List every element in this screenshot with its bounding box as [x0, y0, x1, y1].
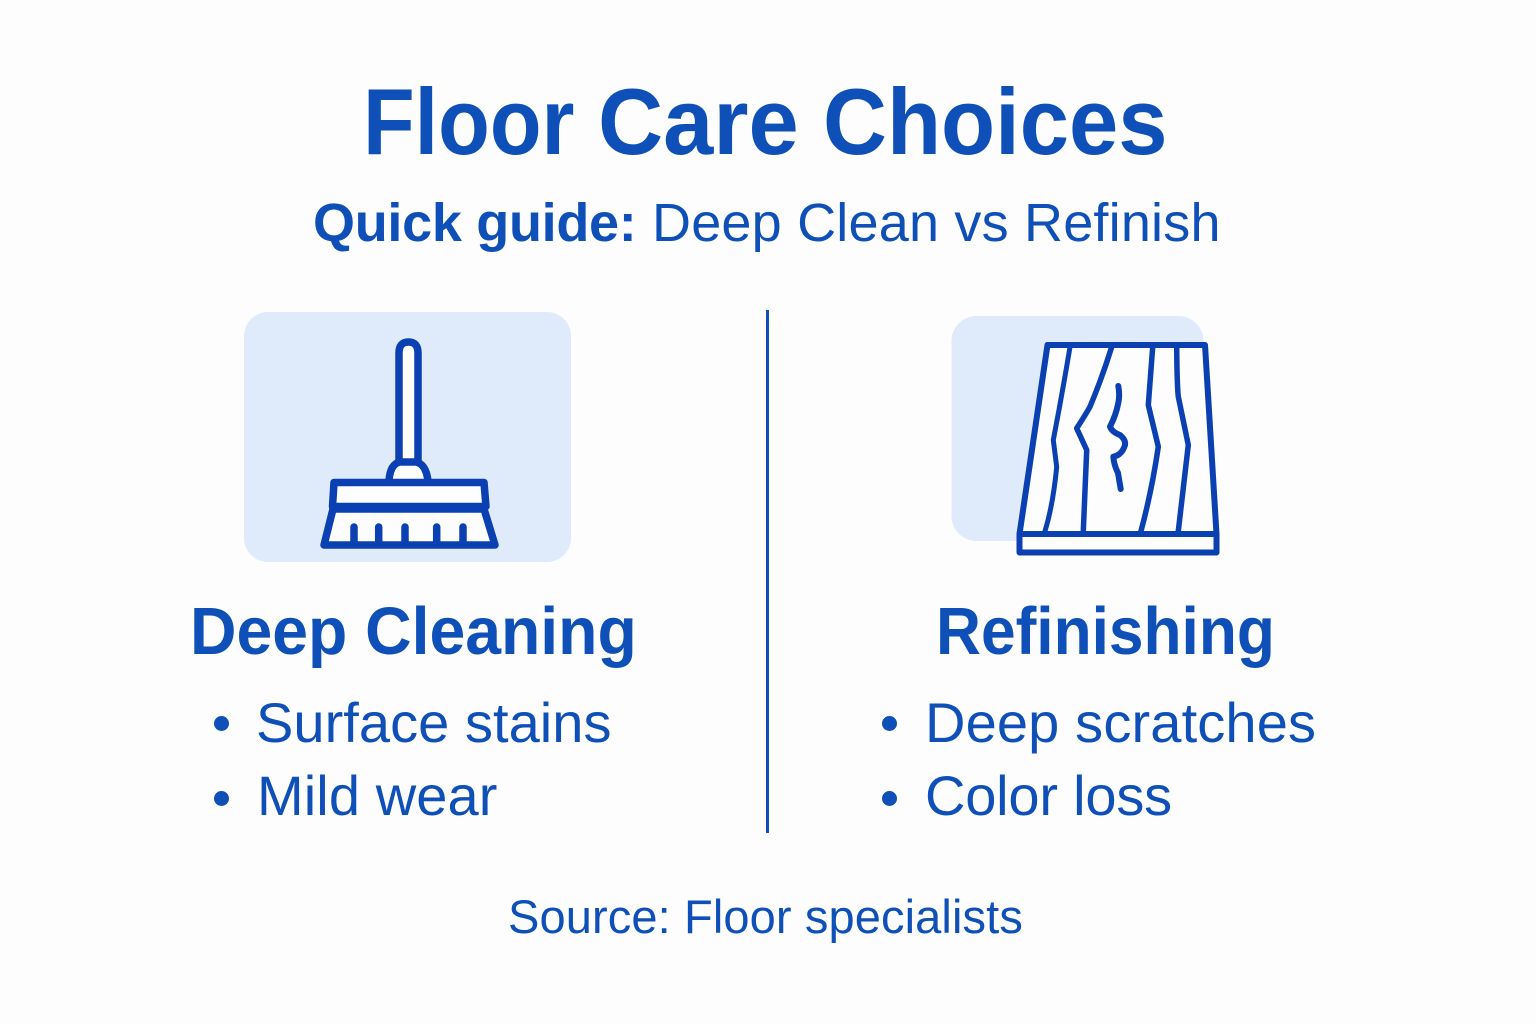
list: deep cleaning — [214, 691, 612, 827]
subtitle: Quick guide: — [313, 193, 636, 253]
panel: refinishing — [882, 316, 1316, 827]
list item: mild wear: Mild wear — [257, 764, 498, 827]
title: Care — [598, 69, 799, 174]
list item: surface stains: Surface stains — [256, 691, 612, 754]
panel: deep cleaning — [190, 312, 637, 827]
title: Floor — [363, 69, 574, 174]
source note: Source: Floor specialists — [508, 890, 1023, 943]
heading: deep cleaning: Deep Cleaning — [190, 594, 637, 669]
heading: refinishing: Refinishing — [936, 594, 1275, 669]
title — [363, 69, 1167, 174]
icon: wood plank — [952, 316, 1220, 556]
center divider — [766, 310, 769, 833]
icon: broom — [244, 312, 571, 562]
list item: deep scratches: Deep scratches — [925, 691, 1316, 754]
list item: color loss: Color loss — [925, 764, 1172, 827]
list: refinishing — [882, 691, 1316, 827]
title: Choices — [823, 69, 1167, 174]
subtitle: Deep Clean vs Refinish — [652, 193, 1221, 253]
subtitle — [313, 193, 1221, 253]
